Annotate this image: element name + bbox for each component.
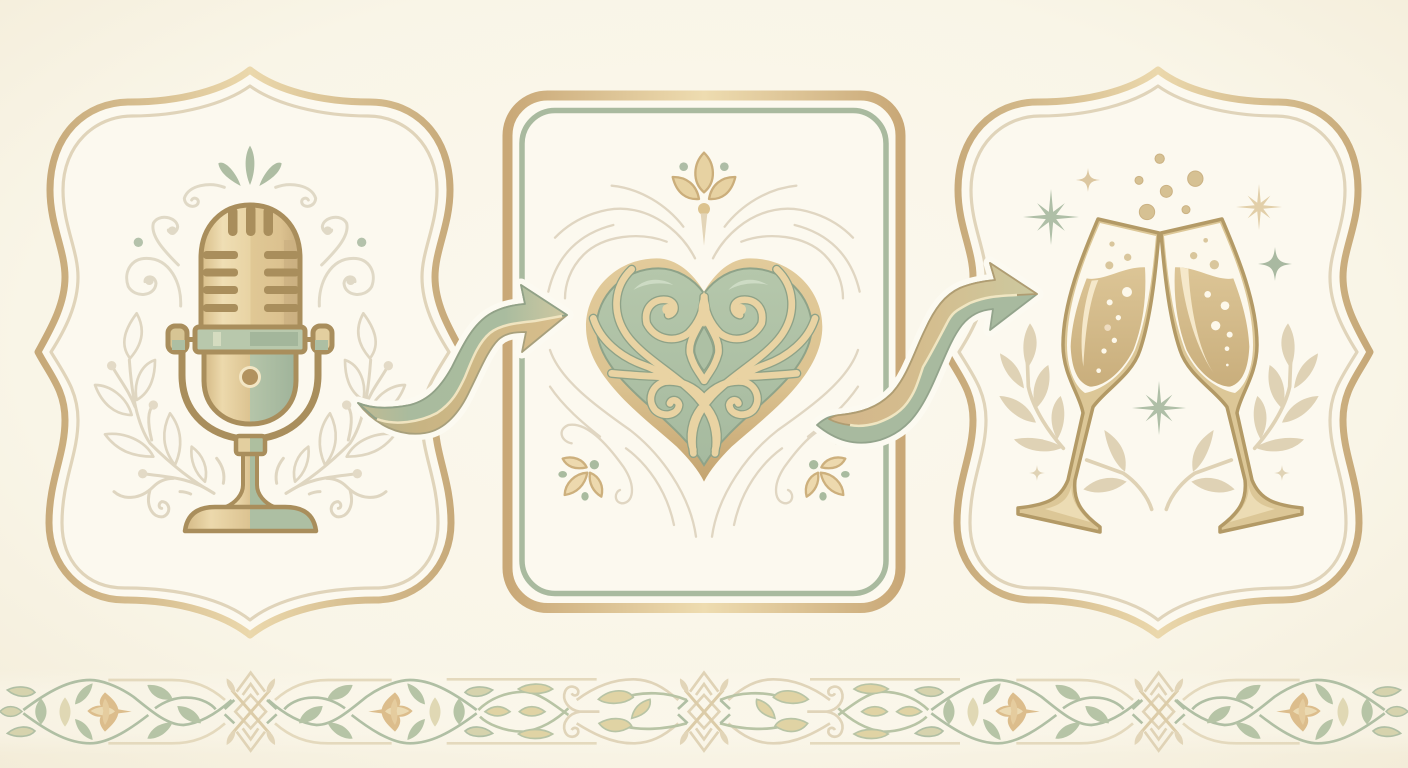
- left flute: [1018, 219, 1159, 532]
- yoke arms and side tabs: [168, 326, 332, 438]
- panel: champagne toast: [946, 70, 1370, 635]
- collar band: [195, 327, 305, 352]
- laurel wreath left and right: [95, 313, 405, 517]
- floral decoration around microphone: [127, 146, 373, 306]
- border edge leaves: [0, 707, 1408, 716]
- arrow: microphone to heart: [358, 285, 567, 434]
- sparkle stars: [1023, 168, 1292, 481]
- decorative vine border: [0, 668, 1408, 755]
- crown flower ornament above heart: [673, 153, 735, 246]
- border unit: right knot and vines: [915, 673, 1401, 751]
- microphone head: [201, 205, 300, 325]
- microphone lower body: [204, 352, 296, 424]
- frame: gold and green rounded rectangle: [508, 96, 900, 608]
- radiating flourish lines: [548, 186, 860, 537]
- small flowers left and right: [558, 457, 850, 501]
- laurel sprigs: [999, 323, 1319, 509]
- border unit: centre knot and flourishes: [447, 673, 960, 751]
- panel: microphone: [38, 70, 462, 635]
- panel: heart: [508, 96, 900, 608]
- border unit: left knot and vines: [7, 673, 493, 751]
- frame: left ornate shield: [38, 70, 462, 635]
- stand base: [185, 507, 316, 531]
- frame: right ornate shield: [946, 70, 1370, 635]
- border band background: [0, 668, 1408, 755]
- icon: microphone: [168, 205, 332, 531]
- icon: champagne flutes: [1018, 219, 1302, 532]
- arrow: heart to champagne: [817, 263, 1037, 443]
- stand stem: [226, 436, 274, 507]
- right flute: [1161, 219, 1302, 532]
- rising bubbles: [1135, 154, 1203, 220]
- icon: ornate heart: [586, 258, 822, 482]
